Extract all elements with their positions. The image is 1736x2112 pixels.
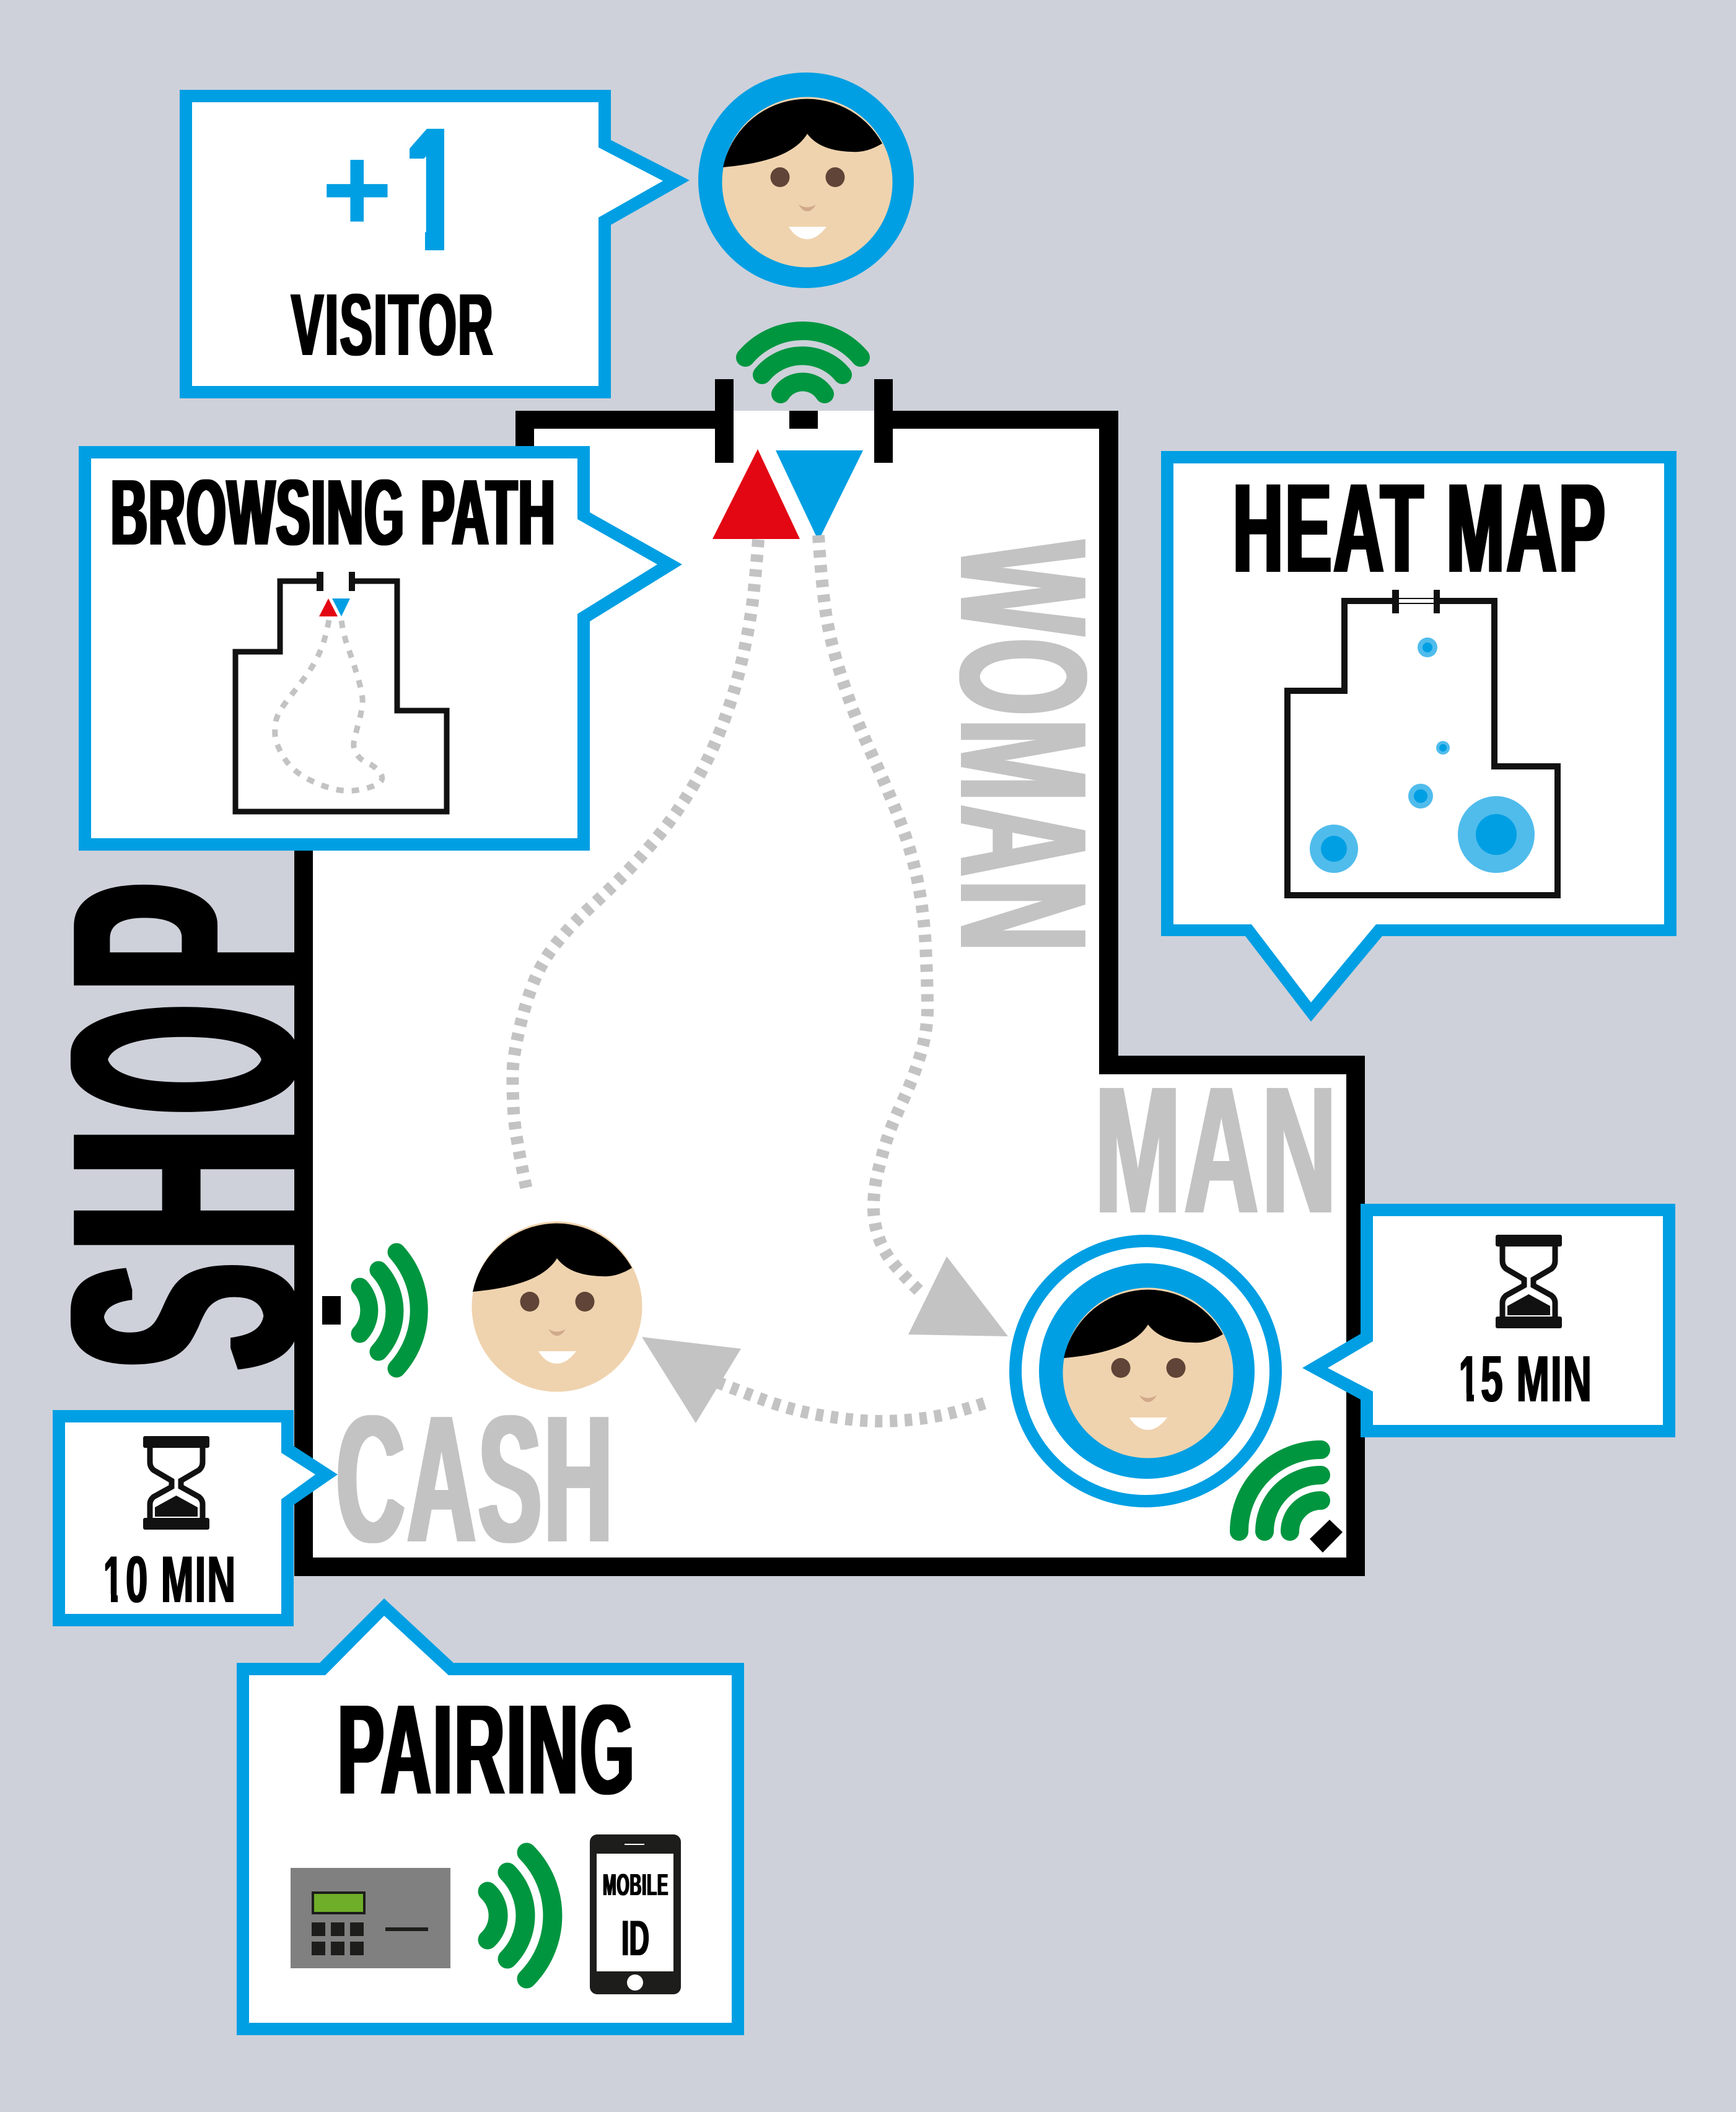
arrow: toward cash (642, 1337, 741, 1423)
icon: hourglass (143, 1436, 209, 1530)
pairing heading: PAIRING (338, 1678, 636, 1821)
man zone sensor (1310, 1520, 1343, 1553)
plus sign: + (322, 121, 392, 257)
icon: man zone wifi signal (1239, 1450, 1321, 1531)
number one: 1 (406, 91, 462, 288)
infographic canvas: P (4, 884, 364, 991)
dotted path: entrance to man zone (818, 535, 927, 1290)
icon: blue exit triangle (776, 450, 863, 541)
SHOP vertical title: S (4, 1264, 364, 1369)
duration label (103, 1542, 237, 1616)
icon: pairing wifi signal (488, 1852, 553, 1979)
id label: ID (621, 1911, 649, 1966)
mini floor plan (1287, 590, 1558, 895)
icon: mobile phone (590, 1834, 681, 1994)
mobile label: MOBILE (603, 1869, 669, 1902)
panel: browsing path (79, 446, 682, 851)
panel: visitor count (180, 90, 690, 398)
visitor face in man zone with rings (1015, 1241, 1276, 1501)
icon: entrance wifi signal (745, 331, 861, 394)
panel: heat map (1161, 451, 1677, 1022)
browsing path heading: BROWSING PATH (111, 460, 556, 564)
mini floor plan (235, 572, 447, 812)
arrow: toward man zone (908, 1256, 1008, 1336)
icon: hourglass (1496, 1235, 1562, 1328)
panel: pairing (237, 1598, 744, 2035)
visitor face at cash (472, 1222, 642, 1391)
SHOP vertical title (4, 884, 364, 1369)
mini dotted path (275, 620, 382, 791)
duration label: 1 (1459, 1343, 1479, 1416)
duration label: 1 (103, 1542, 123, 1616)
visitor face outside with blue ring (698, 72, 914, 288)
dotted path: man zone to cash (712, 1380, 984, 1421)
cash sensor (322, 1296, 341, 1325)
dotted path: entrance to cash (512, 540, 758, 1193)
icon: payment terminal (291, 1868, 450, 1968)
MAN zone label: MAN (1095, 1049, 1339, 1251)
shop floor plan (294, 379, 1365, 1576)
duration label: 0 MIN (126, 1542, 237, 1616)
visitor label: VISITOR (291, 276, 494, 374)
panel: 10 minutes (53, 1410, 338, 1626)
SHOP vertical title: O (4, 1006, 364, 1113)
CASH zone label: CASH (336, 1378, 615, 1580)
mini entry triangle (319, 598, 338, 616)
heat spots (1310, 638, 1535, 873)
panel: 15 minutes (1302, 1204, 1675, 1437)
icon: cash wifi signal (360, 1252, 419, 1369)
SHOP vertical title: H (4, 1128, 364, 1251)
duration label: 5 MIN (1481, 1343, 1593, 1416)
duration label (1459, 1343, 1593, 1416)
icon: red entry triangle (712, 449, 800, 539)
WOMAN zone label: WOMAN (923, 541, 1124, 955)
mini exit triangle (332, 598, 350, 616)
door sensor (789, 411, 818, 429)
